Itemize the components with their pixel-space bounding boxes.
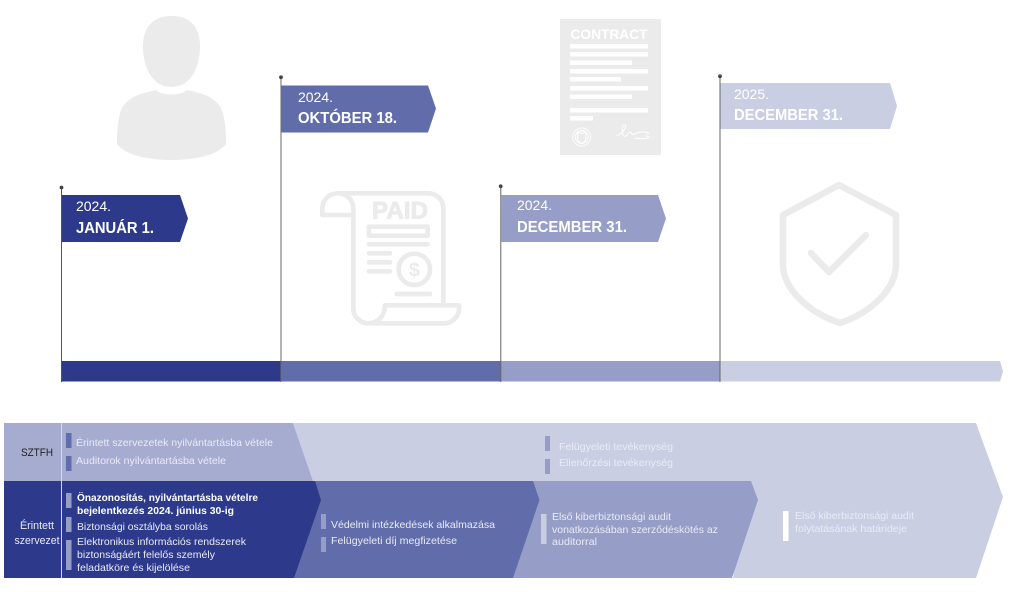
icon: contract	[560, 19, 661, 155]
row: Érintett szervezet: Biztonsági osztályba sorolás	[77, 522, 208, 533]
row: SZTFH	[4, 423, 313, 481]
row: Érintett szervezet: bejelentkezés 2024. június 30-ig	[77, 506, 234, 517]
row: Érintett szervezet: Érintett	[20, 519, 54, 532]
flag: 2025 december 31: 2025.	[734, 87, 769, 102]
phase: light chevron: Első kiberbiztonsági audit	[552, 512, 671, 523]
phase: lightest chevron	[293, 423, 1003, 578]
flag: 2024 január 1: JANUÁR 1.	[76, 218, 154, 237]
flag: 2024 január 1	[60, 186, 188, 382]
flag: 2024 október 18	[279, 75, 436, 382]
phase: light chevron	[513, 481, 758, 578]
row: Érintett szervezet: feladatköre és kijelölése	[77, 563, 190, 574]
row: Érintett szervezet: Elektronikus információs rendszerek	[77, 537, 247, 548]
panel: phases table	[4, 423, 1003, 578]
phase: mid chevron: Védelmi intézkedések alkalmazása	[331, 520, 495, 531]
flag: 2024 január 1: 2024.	[76, 199, 111, 214]
phase: light chevron: auditorral	[552, 537, 597, 548]
timeline bar	[61, 361, 1003, 382]
phase: lightest chevron: Első kiberbiztonsági audit	[795, 511, 914, 522]
icon: paid receipt	[322, 193, 459, 323]
phase: lightest chevron: folytatásának határideje	[795, 524, 907, 535]
flag: 2024 december 31	[499, 184, 666, 382]
icon: paid receipt: PAID	[372, 197, 428, 224]
row: SZTFH: Auditorok nyilvántartásba vétele	[76, 456, 226, 467]
row: SZTFH: SZTFH	[21, 447, 53, 459]
flag: 2024 december 31: 2024.	[517, 198, 552, 213]
row: SZTFH: Érintett szervezetek nyilvántartásba vétele	[76, 436, 273, 449]
row: Érintett szervezet	[4, 481, 321, 578]
icon: contract: CONTRACT	[570, 26, 648, 42]
row: Érintett szervezet: szervezet	[14, 535, 60, 547]
row: Érintett szervezet: biztonságáért felelős személy	[77, 550, 216, 561]
phase: light chevron: vonatkozásában szerződéskötés az	[552, 525, 718, 536]
phase: lightest chevron: Felügyeleti tevékenység	[559, 442, 673, 453]
flag: 2025 december 31	[718, 74, 897, 382]
row: Érintett szervezet: Önazonosítás, nyilvántartásba vételre	[77, 491, 258, 504]
icon: person	[117, 16, 226, 160]
flag: 2024 december 31: DECEMBER 31.	[517, 219, 627, 236]
icon: shield with check	[783, 185, 896, 323]
flag: 2024 október 18: OKTÓBER 18.	[298, 108, 397, 127]
phase: lightest chevron: Ellenőrzési tevékenység	[559, 458, 673, 469]
phase: mid chevron: Felügyeleti díj megfizetése	[331, 536, 457, 547]
icon: paid receipt: $	[409, 260, 420, 281]
flag: 2024 október 18: 2024.	[298, 90, 333, 105]
flag: 2025 december 31: DECEMBER 31.	[734, 107, 843, 124]
phase: mid chevron	[293, 481, 540, 578]
